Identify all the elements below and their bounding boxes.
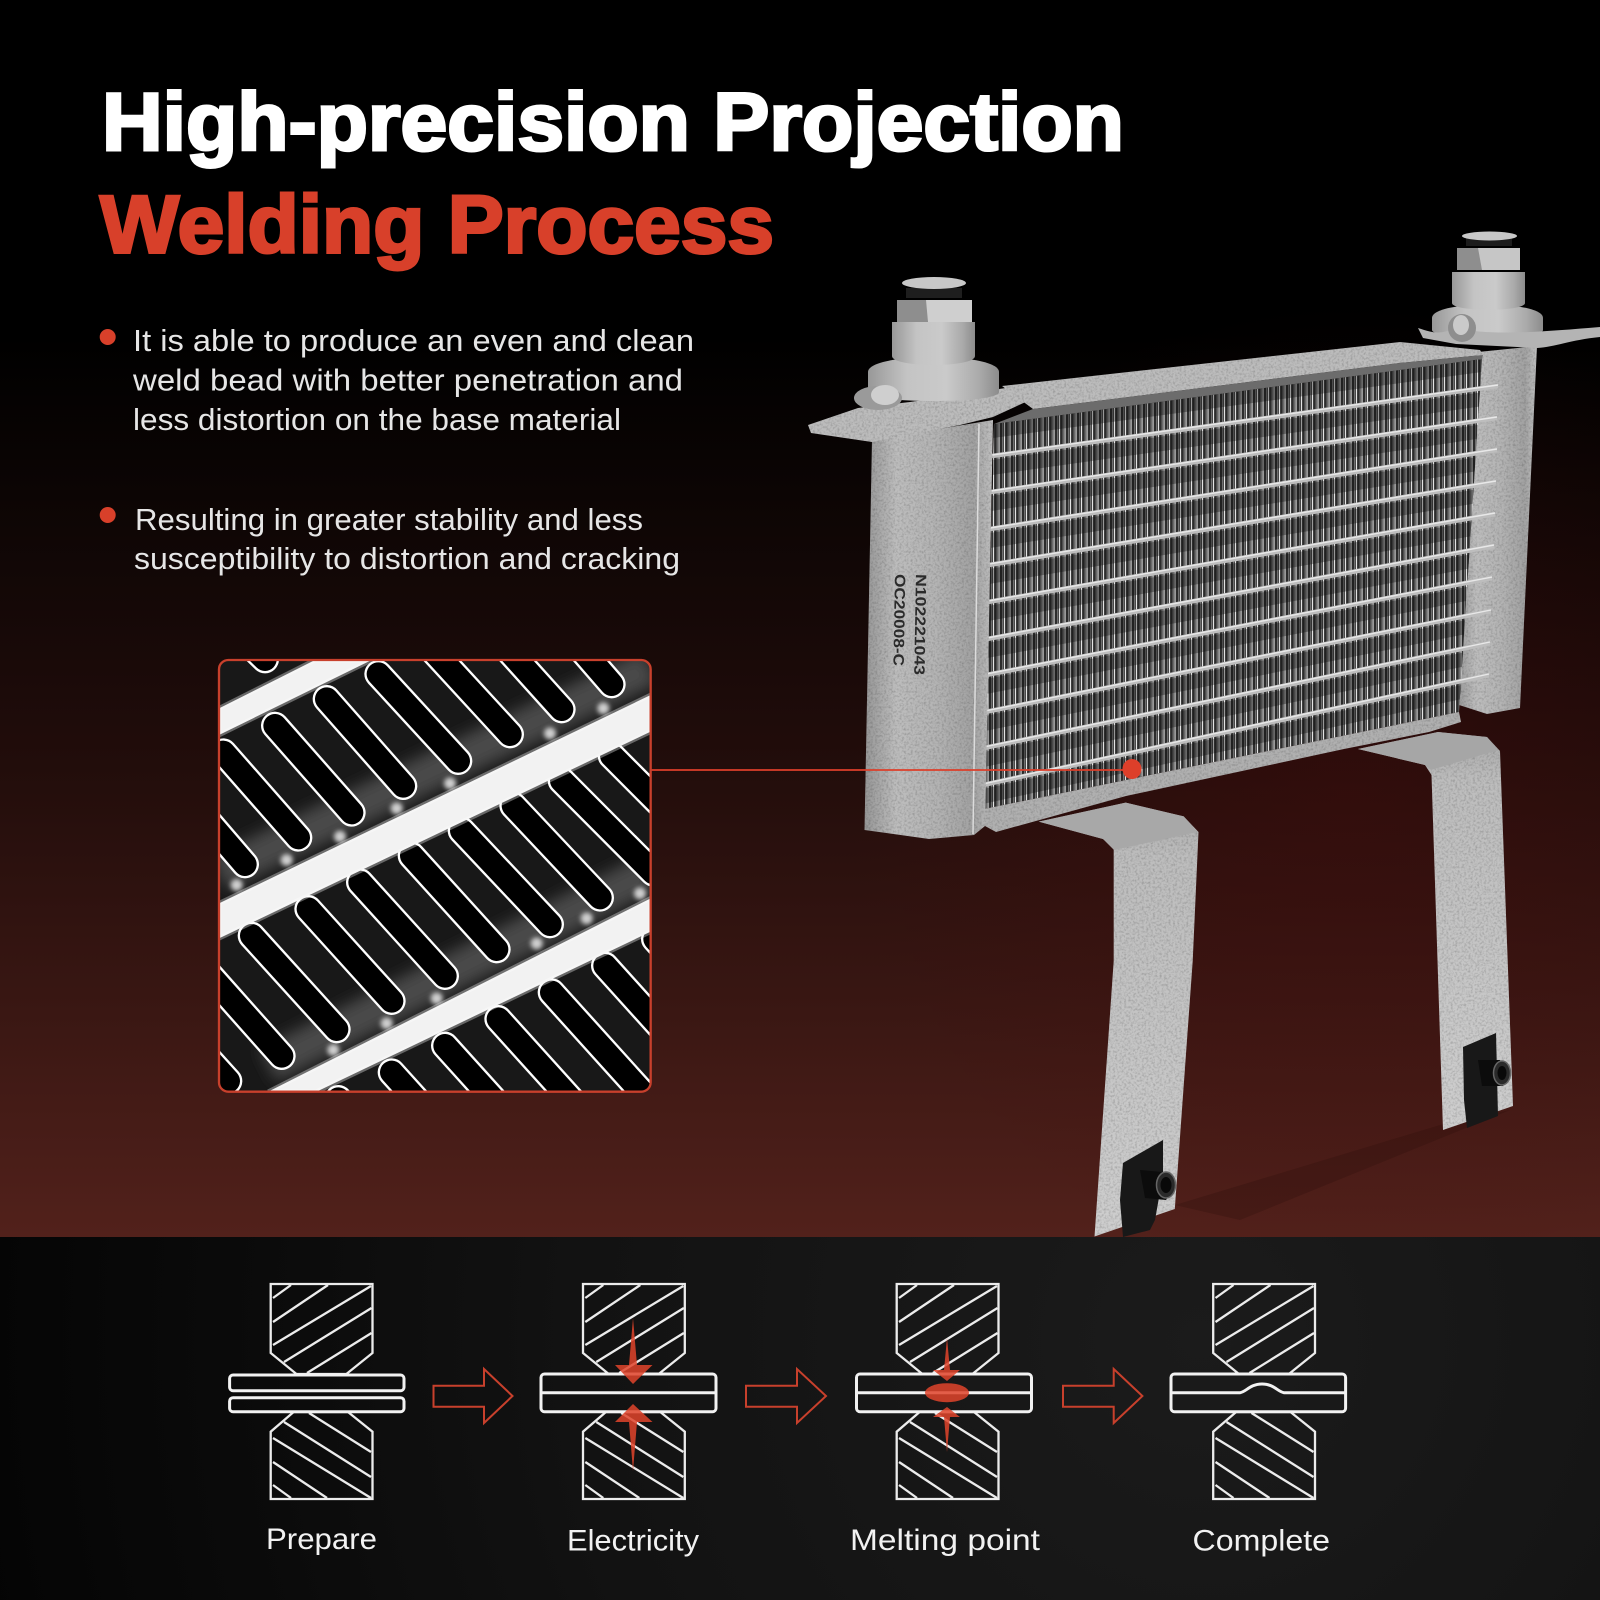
right tank: [1456, 346, 1537, 714]
left stud: [1140, 1170, 1176, 1200]
step 2: electricity: [541, 1284, 716, 1558]
tank seam: [973, 424, 979, 834]
step 4: complete: [1171, 1284, 1346, 1558]
weld glow spots: [231, 702, 646, 1056]
fin core: [983, 359, 1498, 809]
electrodes: [583, 1284, 685, 1499]
bottom band: [0, 1237, 1600, 1600]
title: High-precision Projection: [102, 77, 1124, 168]
bullet text block 2: Resulting in greater stability and less: [135, 502, 643, 537]
welded plates: [1171, 1374, 1346, 1412]
left nut plate: [1120, 1140, 1163, 1237]
right stud: [1478, 1060, 1510, 1086]
right mounting bracket: [1358, 732, 1513, 1130]
left flange: [808, 383, 1040, 442]
right fitting: [1432, 232, 1543, 338]
two separate plates: [230, 1375, 404, 1412]
title: [100, 77, 1124, 270]
electrodes: [271, 1284, 372, 1499]
inset border: [219, 660, 651, 1092]
bullet text block 2: [100, 502, 680, 576]
grey haze between fins: [219, 667, 651, 1065]
left tank: [864, 420, 993, 839]
title: Welding Process: [100, 180, 774, 270]
left fitting: [854, 277, 999, 410]
top plate: [994, 342, 1483, 424]
bullet text block 1: weld bead with better penetration and: [132, 362, 683, 398]
arrow 1: [434, 1369, 512, 1423]
white tube bars: [219, 660, 651, 1092]
joined plates: [541, 1374, 716, 1412]
label: melting point: Melting point: [850, 1524, 1041, 1557]
bullet text block 1: It is able to produce an even and clean: [133, 323, 694, 358]
left mounting bracket: [1039, 803, 1198, 1237]
right nut plate: [1463, 1033, 1498, 1128]
callout leader line: [651, 769, 1132, 771]
label: prepare: Prepare: [266, 1523, 377, 1556]
background gradient: [0, 0, 1600, 1237]
callout dot: [1122, 759, 1142, 779]
bullet text block 1: less distortion on the base material: [133, 402, 621, 437]
bullet text block 2: susceptibility to distortion and cracking: [134, 541, 680, 576]
bullet dot 2: [100, 507, 116, 523]
floor shadows of brackets: [1175, 1110, 1510, 1220]
stamped part numbers: [889, 574, 929, 675]
bullet text block 1: [100, 323, 694, 437]
inset: weld close-up: [218, 658, 652, 1093]
bottom plate of core: [984, 712, 1461, 832]
current arrows and weld nugget: [925, 1338, 969, 1452]
bullet dot 1: [100, 329, 116, 345]
fin loops: [220, 661, 650, 1090]
right flange: [1418, 314, 1600, 348]
product photo: oil cooler illustration: [808, 232, 1600, 1237]
stamped part numbers: OC20008-C: [889, 574, 908, 666]
stamped part numbers: N102221043: [910, 574, 929, 675]
dark shading on fins: [983, 359, 1498, 804]
electrodes: [897, 1284, 998, 1499]
step 3: melting point: [850, 1284, 1041, 1557]
tube bars: [983, 385, 1498, 785]
joined plates: [856, 1374, 1032, 1412]
label: electricity: Electricity: [567, 1524, 699, 1558]
current arrows: [615, 1318, 652, 1471]
arrow 2: [746, 1369, 826, 1423]
step 1: prepare: [230, 1284, 404, 1556]
electrodes: [1213, 1284, 1315, 1499]
arrow 3: [1063, 1369, 1142, 1423]
label: complete: Complete: [1192, 1524, 1330, 1558]
